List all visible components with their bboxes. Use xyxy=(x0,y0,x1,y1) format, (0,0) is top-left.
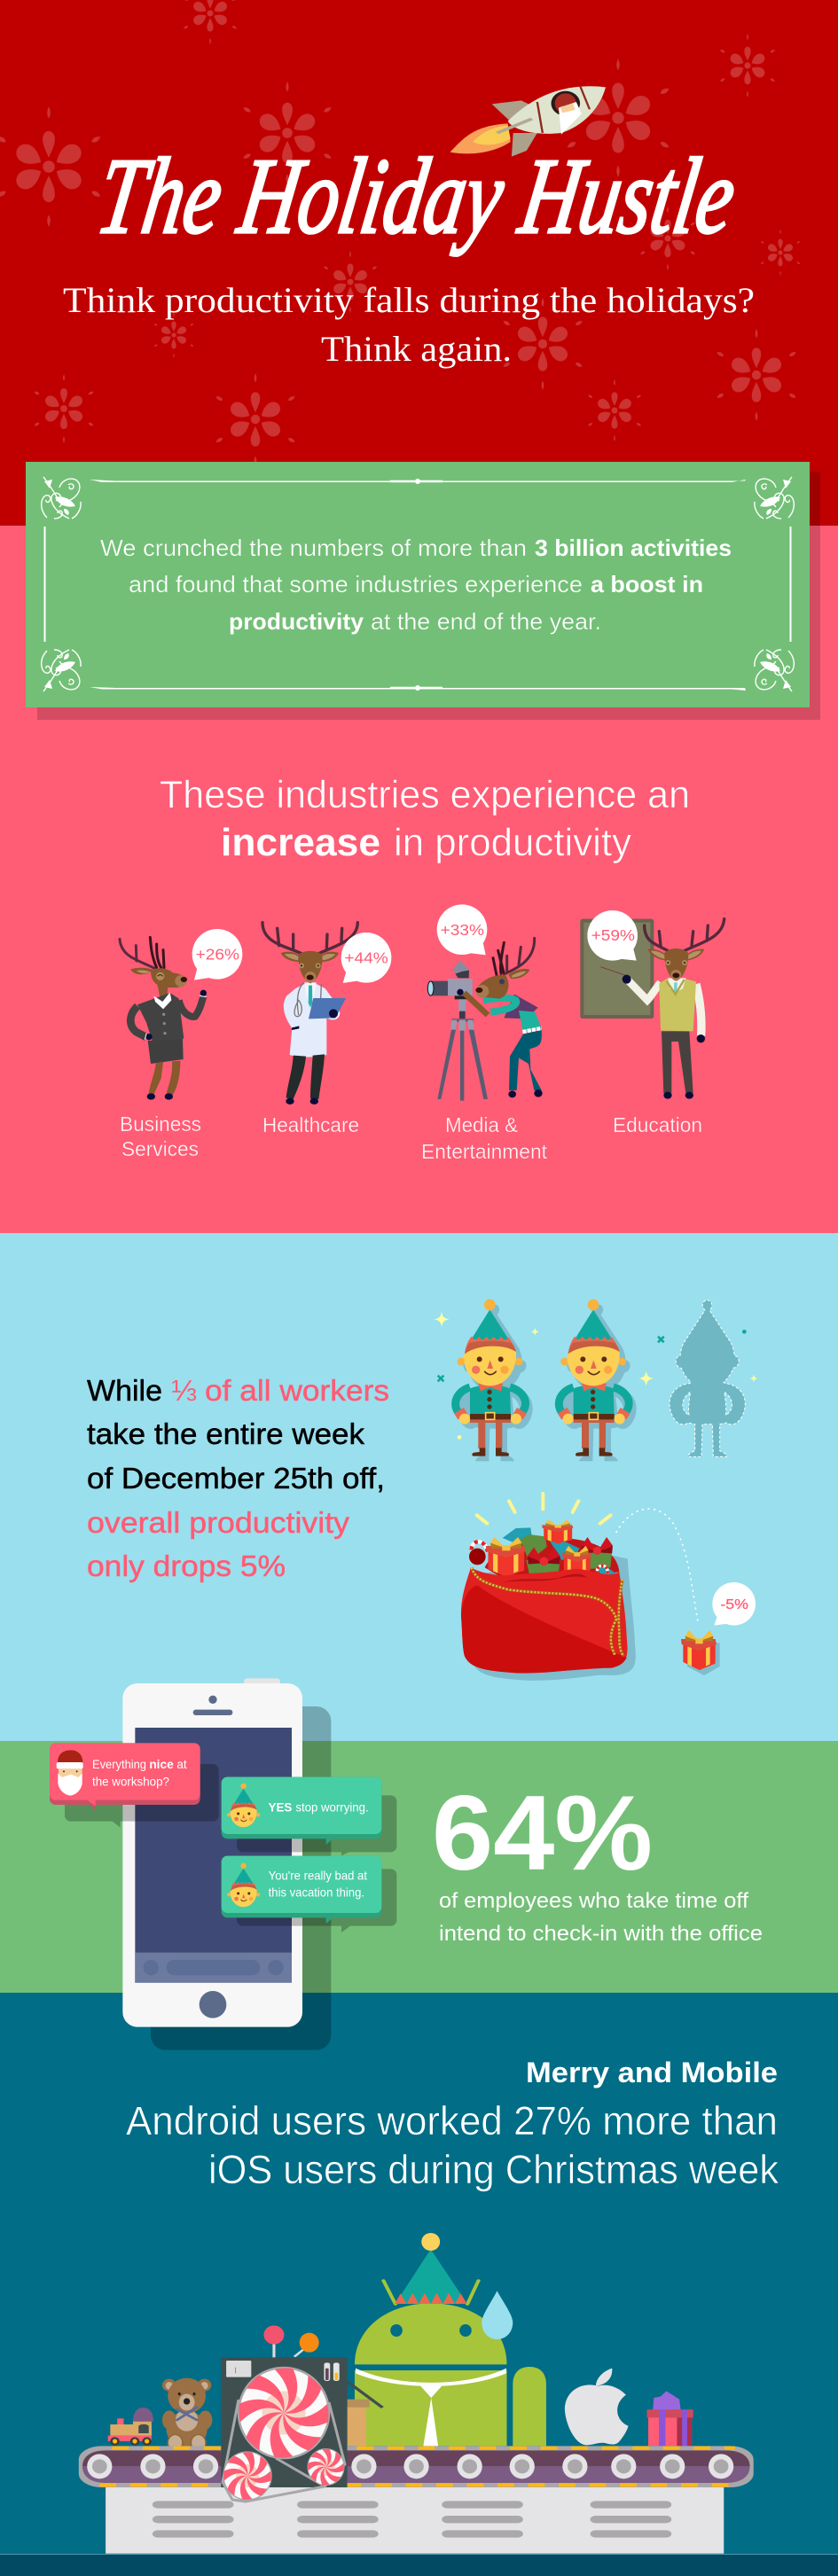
icon: santa xyxy=(57,1750,83,1796)
panel: deer right pair xyxy=(427,904,724,1101)
industry labels: Healthcare xyxy=(262,1113,359,1136)
heading: industries xyxy=(160,773,690,864)
heading: merry and mobile: Merry and Mobile xyxy=(526,2057,778,2088)
stat caption: of employees who take time off xyxy=(439,1889,748,1913)
rays xyxy=(477,1494,611,1524)
chat text: vacation: this vacation thing. xyxy=(269,1885,364,1899)
text block: android vs ios: Android users worked 27% more than xyxy=(126,2098,778,2143)
chat text: santa: at xyxy=(176,1757,187,1771)
intro text: 3 billion activities xyxy=(535,535,732,561)
bubble: +26%: +26% xyxy=(196,946,239,964)
chat text: yes: stop worrying. xyxy=(295,1799,369,1814)
industry labels: Entertainment xyxy=(421,1140,548,1163)
industry labels: Business xyxy=(120,1112,201,1136)
chat bubble: elf yes xyxy=(222,1777,381,1845)
text block: one third of workers: only drops 5% xyxy=(87,1550,286,1582)
intro text: a boost in xyxy=(591,571,703,597)
panel: intro xyxy=(26,462,820,720)
candy wheels xyxy=(223,2368,345,2502)
industry labels xyxy=(120,1112,702,1163)
party hat xyxy=(395,2233,467,2304)
stat: 64%: 64% xyxy=(432,1774,653,1893)
deer: media xyxy=(427,938,543,1101)
conveyor belt xyxy=(79,2446,754,2487)
stat caption: intend to check-in with the office xyxy=(439,1922,763,1946)
text block: one third of workers: While xyxy=(87,1374,162,1407)
elf shadows xyxy=(457,1305,637,1461)
heading: industries: increase xyxy=(221,821,380,864)
android xyxy=(355,2233,546,2446)
bubble: +59% xyxy=(587,910,638,961)
bubble: -5% xyxy=(712,1582,756,1626)
subtitle: Think productivity falls during the holidays? xyxy=(63,280,755,320)
phone xyxy=(122,1678,302,2027)
ornamental frame xyxy=(42,477,794,691)
sack xyxy=(461,1567,627,1674)
sack shadow xyxy=(469,1550,636,1681)
subtitle: Think again. xyxy=(321,329,512,369)
heading: industries: These industries experience an xyxy=(160,773,690,816)
teddy bear xyxy=(162,2378,212,2451)
bubble: +33% xyxy=(437,904,487,955)
deer: healthcare xyxy=(262,923,357,1105)
text block: android vs ios: iOS users during Christmas week xyxy=(208,2147,779,2192)
industry labels: Education xyxy=(613,1113,702,1136)
apple logo xyxy=(565,2369,629,2445)
chat text: santa xyxy=(92,1757,187,1788)
stat caption xyxy=(439,1889,763,1946)
elf 1 xyxy=(454,1300,527,1456)
chat text: santa: nice xyxy=(149,1757,174,1771)
chat text: santa: Everything xyxy=(92,1757,146,1771)
icon: santa rocket xyxy=(450,86,606,157)
dotted arc xyxy=(616,1509,698,1624)
chat text: vacation xyxy=(269,1869,367,1899)
deer: education xyxy=(600,919,724,1099)
text block: one third of workers: of December 25th off, xyxy=(87,1462,385,1495)
chat text: yes: YES xyxy=(269,1799,292,1814)
text block: one third of workers xyxy=(87,1374,389,1582)
icon: fallen gift xyxy=(681,1630,720,1675)
panel: conveyor scene xyxy=(79,2233,754,2554)
panel: deer left pair xyxy=(120,923,391,1105)
panel: elves and sack xyxy=(434,1300,758,1681)
intro text: productivity xyxy=(229,608,364,635)
bubble: +44% xyxy=(341,933,391,983)
deer: business services xyxy=(120,937,207,1100)
missing elf silhouette xyxy=(670,1300,745,1456)
cardboard box xyxy=(348,2400,370,2446)
heading: industries: in productivity xyxy=(394,821,631,864)
presents xyxy=(469,1519,619,1581)
text block: one third of workers: ⅓ xyxy=(171,1374,197,1407)
text block: one third of workers: take the entire week xyxy=(87,1417,365,1450)
bubble: +26% xyxy=(192,929,242,980)
phone shadow xyxy=(151,1706,331,2050)
text block: one third of workers: overall productivity xyxy=(87,1506,350,1539)
intro text xyxy=(100,535,732,635)
chat bubble: elf vacation xyxy=(222,1856,381,1924)
snowflake pattern xyxy=(0,0,801,465)
bubble: +33%: +33% xyxy=(441,921,484,939)
text block: android vs ios xyxy=(126,2098,779,2192)
purple gift xyxy=(646,2391,693,2446)
chalkboard xyxy=(580,919,654,1019)
industry labels: Services xyxy=(121,1137,199,1160)
chat text: santa: the workshop? xyxy=(92,1774,169,1788)
intro text: at the end of the year. xyxy=(371,608,601,635)
toy train xyxy=(108,2408,153,2446)
bubble: -5%: -5% xyxy=(720,1597,748,1612)
industry labels: Media & xyxy=(445,1113,518,1136)
intro text: and found that some industries experience xyxy=(129,571,583,597)
chat bubble shadows xyxy=(65,1764,396,1932)
intro text: We crunched the numbers of more than xyxy=(100,535,527,561)
bubble: +44%: +44% xyxy=(344,948,388,966)
chat text: vacation: You're really bad at xyxy=(269,1869,367,1883)
bubble: +59%: +59% xyxy=(591,926,635,944)
sweat drop xyxy=(482,2291,513,2339)
subtitle xyxy=(63,280,755,369)
icon: elf head xyxy=(227,1784,260,1827)
chat text: yes xyxy=(269,1799,369,1814)
sparkles xyxy=(434,1312,758,1440)
text block: one third of workers: of all workers xyxy=(205,1374,389,1407)
elf 2 xyxy=(558,1300,630,1456)
candy machine xyxy=(221,2357,382,2487)
machine base xyxy=(106,2487,724,2554)
icon: elf head xyxy=(227,1863,260,1907)
lollipops xyxy=(263,2325,319,2358)
chat bubble: santa xyxy=(50,1743,200,1811)
panel: phone and chat xyxy=(50,1678,396,2050)
